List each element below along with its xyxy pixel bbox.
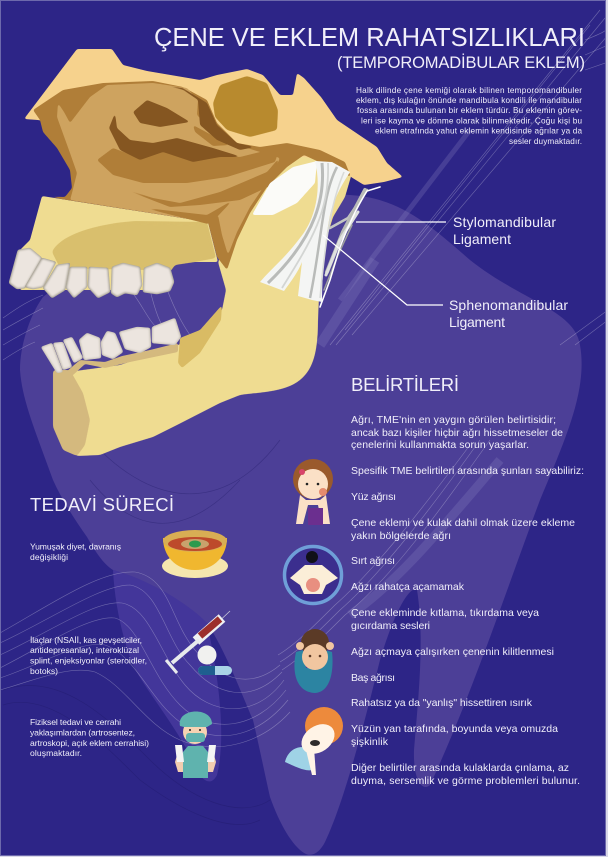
symptoms text: Ağzı rahatça açamamak	[351, 581, 465, 593]
symptoms text: duyma, sersemlik ve görme problemleri bulunur.	[351, 775, 580, 787]
symptoms text: Yüzün yan tarafında, boyunda veya omuzda	[351, 723, 558, 735]
symptoms text: gıcırdama sesleri	[351, 620, 430, 632]
ligament labels: Ligament	[453, 231, 511, 247]
intro paragraph	[356, 86, 582, 146]
intro paragraph: sesler duymaktadır.	[509, 137, 582, 146]
symptoms text: Yüz ağrısı	[351, 491, 396, 503]
upper teeth	[9, 248, 174, 298]
intro paragraph: eklem etrafında yahut eklemin kendisinde ağrılar ya da	[375, 126, 582, 136]
jaw and ligament illustration	[9, 49, 446, 456]
heading: symptoms: BELİRTİLERİ	[351, 374, 459, 395]
symptoms text: şişkinlik	[351, 736, 389, 748]
lower teeth ridge	[66, 343, 178, 376]
treatment text: surgery: Fiziksel tedavi ve cerrahi	[30, 717, 121, 727]
symptoms text: Baş ağrısı	[351, 672, 395, 684]
treatment text: medication: antidepresanlar), interoklüzal	[30, 645, 139, 655]
treatment text: surgery: yaklaşımlardan (artrosentez,	[30, 728, 135, 738]
ligament labels: Sphenomandibular	[449, 297, 568, 313]
intro paragraph: Halk dilinde çene kemiği olarak bilinen temporomandibuler	[356, 86, 582, 95]
orbital hollow	[213, 76, 278, 137]
heading: treatment: TEDAVİ SÜRECİ	[30, 494, 174, 515]
ligament labels: Ligament	[449, 314, 505, 330]
treatment text: surgery: artroskopi, açık eklem cerrahisi)	[30, 738, 149, 748]
rear mandible shadow	[178, 305, 222, 368]
icon: syringe and pills	[166, 611, 232, 675]
treatment text: surgery	[30, 717, 149, 758]
ligament pointer lines	[323, 222, 446, 305]
treatment text: medication: splint, enjeksiyonlar (steroidler,	[30, 656, 147, 666]
icon: surgeon	[175, 711, 216, 778]
sinus upper streak	[193, 125, 230, 146]
sinus lower band	[140, 200, 233, 224]
second ligament	[320, 187, 380, 307]
tooth silhouette background	[20, 194, 582, 855]
symptoms text: Ağzı açmaya çalışırken çenenin kilitlenmesi	[351, 646, 554, 658]
sinus dark folds	[109, 113, 242, 162]
symptoms text: Diğer belirtiler arasında kulaklarda çınlama, az	[351, 762, 569, 774]
symptoms text: Rahatsız ya da "yanlış" hissettiren ısırık	[351, 697, 533, 709]
symptoms text: Sırt ağrısı	[351, 555, 395, 567]
symptoms text: Çene ekleminde kıtlama, tıkırdama veya	[351, 607, 539, 619]
articular disc	[252, 161, 317, 215]
treatment text: diet	[30, 542, 121, 562]
icon: woman with face pain	[293, 459, 333, 525]
treatment text: medication	[30, 635, 147, 676]
treatment text: diet: Yumuşak diyet, davranış	[30, 542, 121, 552]
chin shadow	[53, 370, 90, 456]
diagonal light streak	[320, 130, 500, 615]
icon: back pain	[284, 546, 342, 604]
lower teeth	[41, 318, 181, 373]
icon: man holding head	[294, 629, 334, 693]
title	[154, 24, 585, 72]
upper skull bone	[24, 49, 403, 185]
sinus mid brown	[97, 147, 280, 183]
faint dark contours	[3, 440, 280, 824]
treatment text: medication: botoks)	[30, 666, 58, 676]
treatment text: surgery: oluşmaktadır.	[30, 748, 82, 758]
intro paragraph: eklem, dış kulağın önünde mandibula kondili ile mandibular	[356, 96, 582, 105]
symptoms text: Spesifik TME belirtileri arasında şunları sayabiliriz:	[351, 465, 584, 477]
title: ÇENE VE EKLEM RAHATSIZLIKLARI	[154, 24, 585, 52]
ligament labels: Stylomandibular	[453, 214, 556, 230]
title: (TEMPOROMADİBULAR EKLEM)	[337, 53, 585, 72]
symptoms text: Çene eklemi ve kulak dahil olmak üzere ekleme	[351, 517, 575, 529]
treatment text: diet: değişikliği	[30, 552, 68, 562]
sinus light area	[57, 83, 280, 255]
icon: soup bowl	[162, 530, 228, 578]
main ligament fan	[260, 161, 350, 302]
ligament labels	[449, 214, 568, 330]
symptoms text: yakın bölgelerde ağrı	[351, 530, 451, 542]
maxilla	[20, 196, 218, 290]
symptoms text	[351, 414, 584, 787]
symptoms text: ancak bazı kişiler hiçbir ağrı hissetmeseler de	[351, 427, 563, 439]
intro paragraph: fossa arasında bulunan bir eklem türdür. Bu eklemin görev-	[357, 106, 582, 115]
intro paragraph: leri ise kayma ve dönme olarak bilinmektedir. Çoğu kişi bu	[361, 116, 582, 126]
symptoms text: çenelerini kullanmakta sorun yaşarlar.	[351, 439, 529, 451]
mandible	[60, 150, 352, 456]
sinus lower streak	[110, 158, 279, 207]
sinus brown base	[33, 81, 351, 270]
icon: person with neck pain	[285, 707, 343, 775]
symptoms text: Ağrı, TME'nin en yaygın görülen belirtisidir;	[351, 414, 556, 426]
treatment text: medication: İlaçlar (NSAİİ, kas gevşeticiler,	[30, 635, 142, 645]
